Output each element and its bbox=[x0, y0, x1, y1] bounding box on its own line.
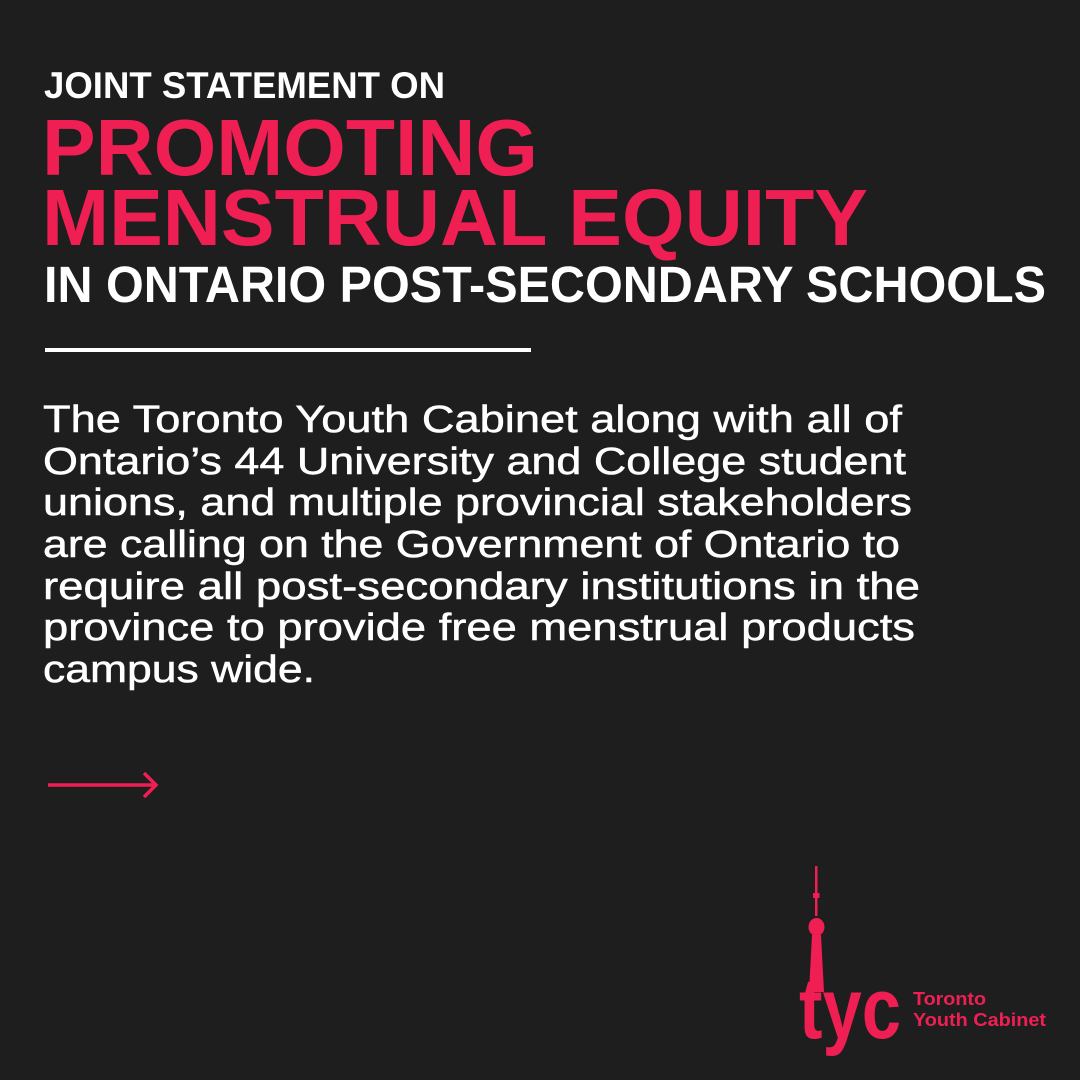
body paragraph: province to provide free menstrual products bbox=[43, 607, 915, 649]
logo bbox=[799, 866, 1046, 1057]
body paragraph: Ontario’s 44 University and College student bbox=[43, 441, 907, 483]
title: main line 1: PROMOTING bbox=[42, 103, 538, 192]
body paragraph: unions, and multiple provincial stakeholders bbox=[43, 482, 912, 524]
arrow bbox=[48, 773, 156, 797]
title: main line 2: MENSTRUAL EQUITY bbox=[42, 173, 868, 262]
title bbox=[42, 65, 1046, 313]
icon: CN tower bbox=[808, 866, 824, 992]
logo: Youth Cabinet bbox=[913, 1010, 1046, 1030]
title: subline: IN ONTARIO POST-SECONDARY SCHOOLS bbox=[44, 256, 1046, 313]
body paragraph: The Toronto Youth Cabinet along with all of bbox=[43, 399, 903, 441]
logo wordmark: Toronto bbox=[913, 989, 986, 1009]
body paragraph: are calling on the Government of Ontario to bbox=[43, 524, 900, 566]
body paragraph: require all post-secondary institutions in the bbox=[43, 566, 920, 608]
body paragraph bbox=[43, 399, 920, 691]
logo letters: tyc bbox=[799, 961, 901, 1057]
title: kicker: JOINT STATEMENT ON bbox=[44, 65, 445, 106]
body paragraph: campus wide. bbox=[43, 649, 315, 691]
